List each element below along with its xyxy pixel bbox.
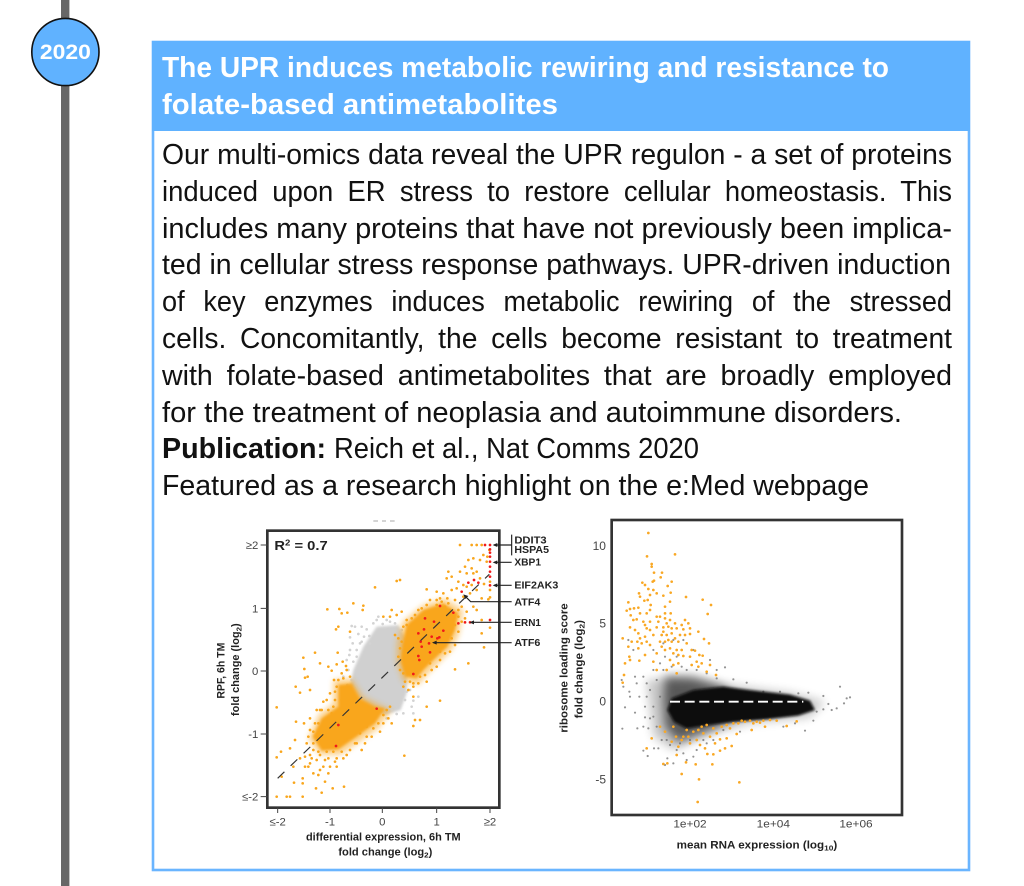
timeline bar bbox=[61, 0, 69, 886]
y axis title: ) bbox=[573, 620, 585, 624]
gene callouts with arrows: EIF2AK3 bbox=[514, 581, 559, 592]
x axis tick labels: ≥2 bbox=[484, 817, 496, 829]
y axis title: 2 bbox=[234, 627, 243, 631]
red scatter: UPR genes bbox=[336, 545, 490, 746]
body text: cells. Concomitantly, the cells become resistant to treatment bbox=[162, 323, 952, 355]
plot frame bbox=[612, 520, 902, 815]
y axis title: ribosome loading score bbox=[559, 603, 571, 733]
body text: includes many proteins that have not previously been implica- bbox=[162, 213, 952, 245]
dashed regression line bbox=[278, 574, 489, 778]
panel: publication card bbox=[152, 41, 970, 870]
y axis tick labels: ≥2 bbox=[246, 540, 258, 552]
y axis title: 2 bbox=[578, 624, 587, 629]
gene callouts with arrows bbox=[432, 535, 559, 649]
x axis tick labels: 1 bbox=[434, 817, 440, 829]
chart: ribosome loading score vs mean RNA expression bbox=[559, 520, 902, 853]
year marker 2020 bbox=[32, 18, 99, 86]
y axis tick labels: 0 bbox=[599, 694, 606, 708]
x axis title: ) bbox=[429, 846, 433, 858]
body text: induced upon ER stress to restore cellular homeostasis. This bbox=[162, 176, 952, 208]
y axis tick labels: 1 bbox=[252, 603, 258, 615]
x axis title: ) bbox=[833, 839, 838, 851]
grey cloud of points bbox=[622, 640, 850, 765]
body text bbox=[161, 139, 952, 502]
x axis title: mean RNA expression (log bbox=[677, 839, 812, 851]
y axis title: RPF, 6h TM bbox=[216, 643, 228, 699]
y axis title: fold change (log bbox=[230, 634, 242, 716]
y axis tick labels bbox=[593, 539, 606, 786]
x axis title: 10 bbox=[824, 844, 833, 853]
body text: for the treatment of neoplasia and autoimmune disorders. bbox=[162, 397, 902, 429]
y axis title: ) bbox=[230, 623, 242, 627]
y axis tick labels: 10 bbox=[593, 539, 606, 553]
R squared annotation: = 0.7 bbox=[290, 538, 328, 553]
body text: with folate-based antimetabolites that are broadly employed bbox=[161, 360, 952, 392]
y axis tick labels: -1 bbox=[248, 729, 258, 741]
gene callouts with arrows: ATF6 bbox=[514, 638, 541, 649]
x axis tick labels: 1e+04 bbox=[757, 819, 790, 831]
x axis tick labels: 1e+06 bbox=[839, 819, 873, 831]
heading band: The UPR induces metabolic rewiring and resistance to bbox=[162, 52, 889, 84]
y axis title: fold change (log bbox=[573, 636, 585, 718]
y axis tick labels: ≤-2 bbox=[242, 792, 258, 804]
orange scatter: regulated genes bbox=[277, 545, 490, 797]
gene callouts with arrows: DDIT3 bbox=[514, 535, 547, 546]
white dashed zero line bbox=[670, 699, 803, 704]
y axis title bbox=[559, 603, 587, 733]
plot frame bbox=[267, 531, 499, 808]
body text: Reich et al., Nat Comms 2020 bbox=[334, 433, 699, 465]
chart: RPF vs differential expression scatter bbox=[216, 521, 559, 860]
body text: Featured as a research highlight on the e:Med webpage bbox=[162, 470, 869, 502]
body text: of key enzymes induces metabolic rewiring of the stressed bbox=[162, 286, 952, 318]
dense black core bbox=[667, 687, 815, 729]
y axis tick labels: -5 bbox=[595, 772, 606, 786]
body text: ted in cellular stress response pathways. UPR-driven induction bbox=[162, 249, 951, 281]
body text: Publication: bbox=[162, 433, 326, 465]
x axis tick labels bbox=[270, 817, 496, 829]
axis ticks bbox=[261, 545, 490, 813]
gene callouts with arrows: ERN1 bbox=[514, 618, 541, 629]
x axis tick labels: 0 bbox=[379, 817, 385, 829]
x axis tick labels: 1e+02 bbox=[673, 819, 707, 831]
heading band: folate-based antimetabolites bbox=[162, 89, 558, 121]
x axis tick labels bbox=[673, 819, 873, 831]
heading band bbox=[152, 41, 970, 131]
stray marks above plot bbox=[373, 519, 395, 522]
gene callouts with arrows: HSPA5 bbox=[514, 545, 549, 556]
body text: Our multi-omics data reveal the UPR regulon - a set of proteins bbox=[162, 139, 952, 171]
orange scatter: significant genes bbox=[623, 533, 797, 802]
R squared annotation: R bbox=[274, 538, 284, 553]
gene callouts with arrows: XBP1 bbox=[514, 558, 541, 569]
y axis title bbox=[216, 623, 243, 716]
x axis title bbox=[306, 831, 461, 860]
x axis tick labels: -1 bbox=[325, 817, 335, 829]
y axis tick labels bbox=[242, 540, 258, 804]
x axis title: differential expression, 6h TM bbox=[306, 831, 461, 843]
R squared annotation: 2 bbox=[285, 538, 291, 548]
grey scatter cloud bbox=[343, 617, 418, 718]
x axis title: fold change (log bbox=[338, 846, 421, 858]
gene callouts with arrows: ATF4 bbox=[514, 597, 541, 608]
y axis tick labels: 0 bbox=[252, 666, 258, 678]
x axis title: 2 bbox=[424, 851, 429, 860]
y axis tick labels: 5 bbox=[599, 617, 606, 631]
x axis tick labels: ≤-2 bbox=[270, 817, 286, 829]
year marker 2020: 2020 bbox=[40, 41, 91, 64]
